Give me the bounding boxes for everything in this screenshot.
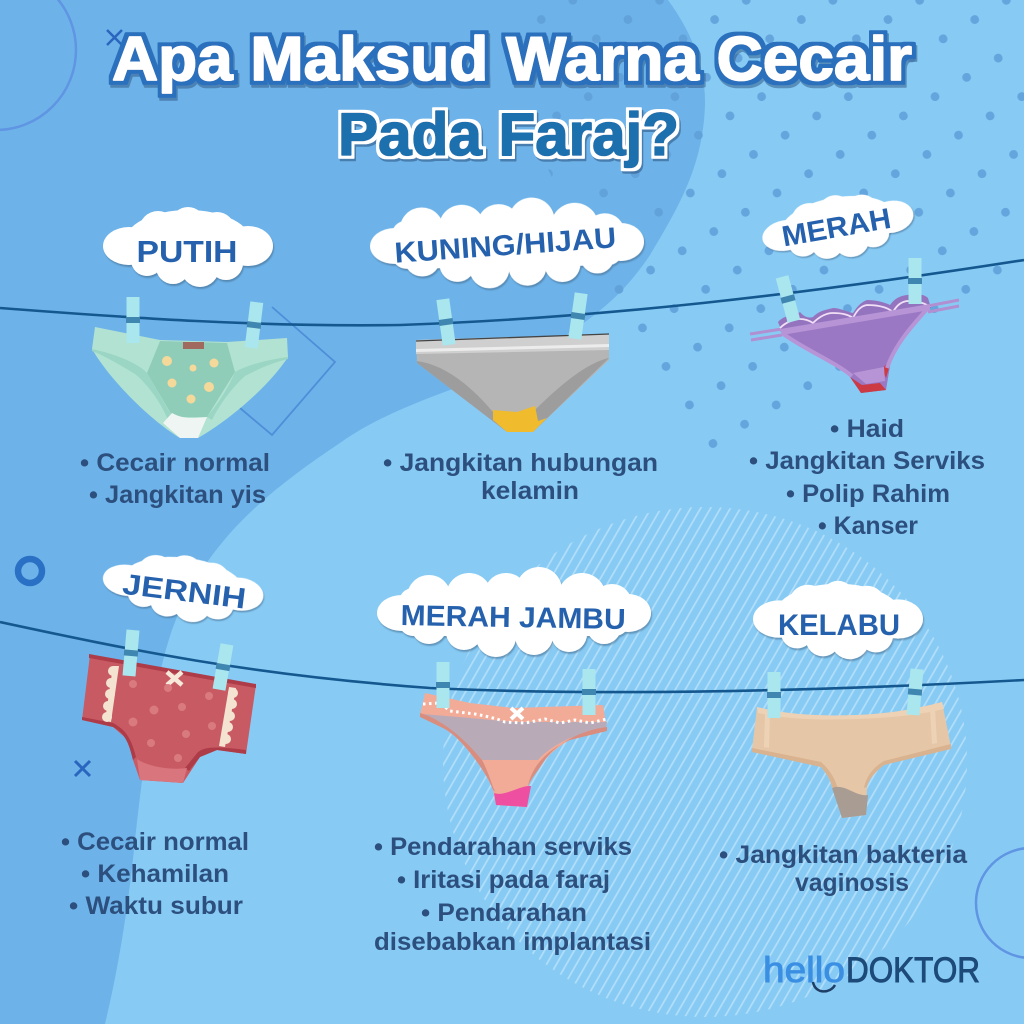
text jernih: • Waktu subur <box>69 892 243 920</box>
decorative cross lower left <box>75 761 90 776</box>
cloud label jernih <box>99 546 267 630</box>
logo: hello doktor: DOKTOR <box>846 951 980 990</box>
cloud label merah jambu: MERAH JAMBU <box>400 600 626 636</box>
cloud label kelabu <box>753 581 923 659</box>
text merah jambu: • Pendarahan <box>421 899 587 927</box>
purple underwear <box>750 294 959 393</box>
cloud label putih: PUTIH <box>136 234 238 269</box>
text kuning/hijau <box>383 449 658 505</box>
text merah: • Polip Rahim <box>786 480 950 508</box>
clothespins <box>126 297 264 349</box>
hatched circle <box>440 505 970 1024</box>
dot pattern <box>500 0 1024 450</box>
red underwear <box>82 654 256 783</box>
panel: kuning/hijau <box>369 196 658 505</box>
decorative circle bottom right <box>976 848 1024 958</box>
text jernih: • Cecair normal <box>61 828 249 856</box>
title: Apa Maksud Warna Cecair <box>112 25 912 94</box>
cloud label jernih: JERNIH <box>121 569 248 616</box>
cloud label kelabu: KELABU <box>778 609 900 642</box>
cloud label merah: MERAH <box>779 203 893 253</box>
text kuning/hijau: kelamin <box>481 477 579 505</box>
decorative circle top left <box>0 0 76 130</box>
panel: kelabu <box>719 581 968 897</box>
clothespins <box>122 629 234 691</box>
text kelabu: • Jangkitan bakteria <box>719 841 968 869</box>
decorative cross top <box>107 30 122 45</box>
logo: hello doktor <box>763 949 980 991</box>
text merah jambu <box>374 833 651 956</box>
logo: hello doktor: hello <box>763 949 845 990</box>
text kuning/hijau: • Jangkitan hubungan <box>383 449 658 477</box>
background darker blue blob <box>0 0 705 1024</box>
text putih <box>80 449 270 509</box>
cloud label kuning/hijau <box>369 196 645 290</box>
clothesline bottom <box>0 622 1024 692</box>
text jernih: • Kehamilan <box>81 860 229 888</box>
text merah <box>749 415 985 540</box>
clothespins <box>436 292 588 346</box>
text putih: • Cecair normal <box>80 449 270 477</box>
cloud label merah jambu <box>377 567 651 657</box>
title <box>112 25 912 168</box>
text merah: • Jangkitan Serviks <box>749 447 985 475</box>
text merah: • Kanser <box>818 512 918 540</box>
cloud label putih <box>103 207 273 287</box>
clothespins <box>767 668 924 718</box>
decorative ring <box>18 559 42 583</box>
panel: jernih <box>61 546 267 920</box>
text merah jambu: • Pendarahan serviks <box>374 833 632 861</box>
panel: merah jambu <box>374 567 651 956</box>
text putih: • Jangkitan yis <box>89 481 266 509</box>
text jernih <box>61 828 249 920</box>
title: Pada Faraj? <box>338 101 679 168</box>
text merah jambu: disebabkan implantasi <box>374 928 651 956</box>
panel: putih <box>80 207 288 509</box>
panel: merah <box>749 182 985 540</box>
text merah jambu: • Iritasi pada faraj <box>397 866 610 894</box>
clothesline top <box>0 260 1024 325</box>
cloud label kuning/hijau: KUNING/HIJAU <box>394 222 617 270</box>
text merah: • Haid <box>830 415 904 443</box>
text kelabu <box>719 841 968 897</box>
beige underwear <box>752 702 951 818</box>
text kelabu: vaginosis <box>795 869 909 897</box>
decorative diamond <box>240 307 335 435</box>
grey underwear <box>416 334 609 432</box>
clothespins <box>436 662 596 715</box>
pink underwear <box>420 693 607 807</box>
mint underwear <box>92 327 288 438</box>
cloud label merah <box>757 182 919 272</box>
clothespins <box>775 258 922 323</box>
